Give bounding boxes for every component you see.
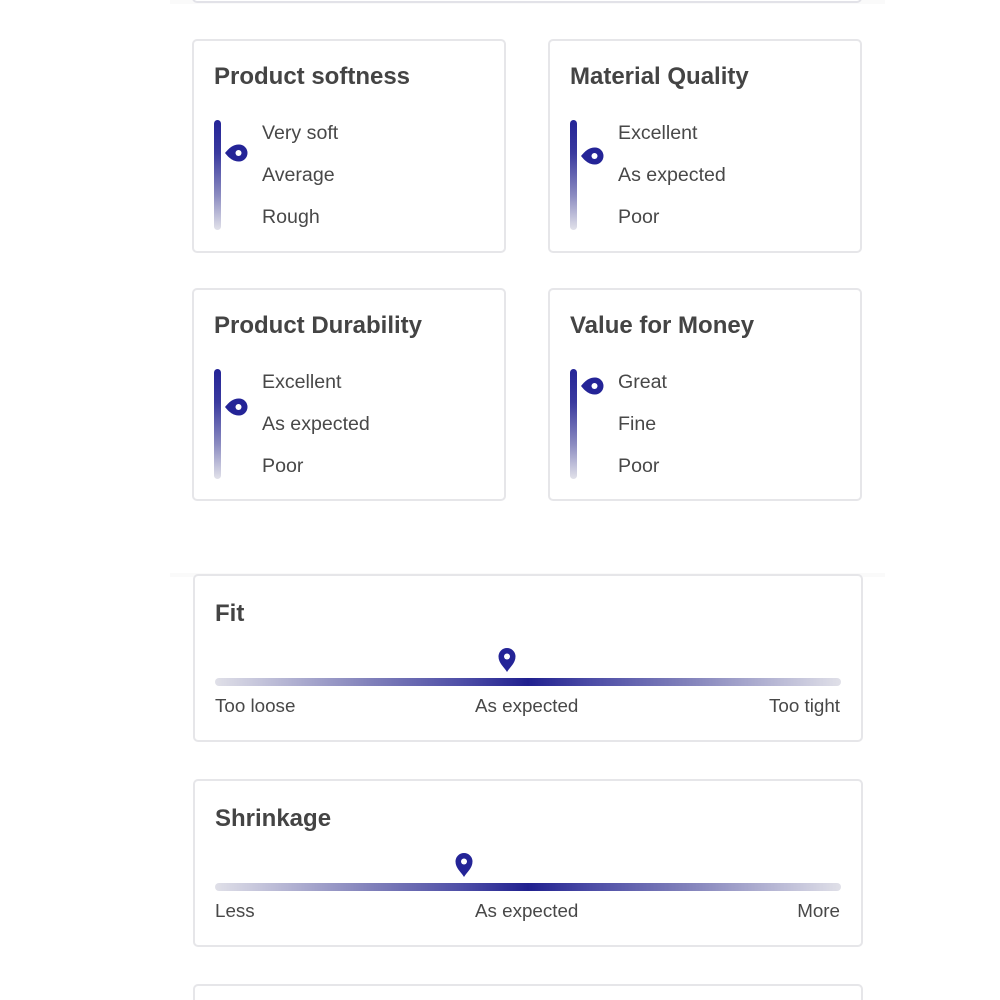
label: as expected: As expected [475, 695, 578, 716]
scale: product durability [214, 369, 221, 479]
label: very soft: Very soft [262, 122, 338, 144]
scale: value for money [570, 369, 577, 479]
heading: material quality: Material Quality [570, 63, 749, 90]
heading: product softness: Product softness [214, 63, 410, 90]
scale: fit [215, 678, 841, 686]
label: poor: Poor [618, 455, 659, 477]
icon: fit marker [498, 648, 516, 672]
icon: durability marker [225, 398, 248, 416]
heading: product durability: Product Durability [214, 312, 422, 339]
label: less: Less [215, 900, 255, 921]
label: too tight: Too tight [769, 695, 840, 716]
label: as expected: As expected [618, 164, 726, 186]
label: poor: Poor [618, 206, 659, 228]
label: great: Great [618, 371, 667, 393]
label: too loose: Too loose [215, 695, 295, 716]
icon: shrinkage marker [456, 853, 472, 877]
label: excellent: Excellent [262, 371, 342, 393]
label: more: More [797, 900, 840, 921]
scale: product softness [214, 120, 221, 230]
label: poor: Poor [262, 455, 303, 477]
scale: material quality [570, 120, 577, 230]
icon: softness marker [225, 144, 248, 162]
top card remnant [192, 0, 862, 3]
label: as expected: As expected [475, 900, 578, 921]
panel: product durability [192, 288, 506, 501]
panel: material quality [548, 39, 862, 253]
heading: shrinkage: Shrinkage [215, 805, 331, 832]
label: rough: Rough [262, 206, 320, 228]
icon: quality marker [581, 148, 604, 164]
heading: value for money: Value for Money [570, 312, 754, 339]
heading: fit: Fit [215, 600, 244, 627]
scale: shrinkage [215, 883, 841, 891]
icon: value marker [581, 378, 604, 394]
label: as expected: As expected [262, 413, 370, 435]
bottom card remnant [193, 984, 863, 1000]
panel: value for money [548, 288, 862, 501]
label: excellent: Excellent [618, 122, 698, 144]
panel: product softness [192, 39, 506, 253]
label: fine: Fine [618, 413, 656, 435]
panel: shrinkage [193, 779, 863, 947]
label: average: Average [262, 164, 335, 186]
panel: fit [193, 574, 863, 742]
